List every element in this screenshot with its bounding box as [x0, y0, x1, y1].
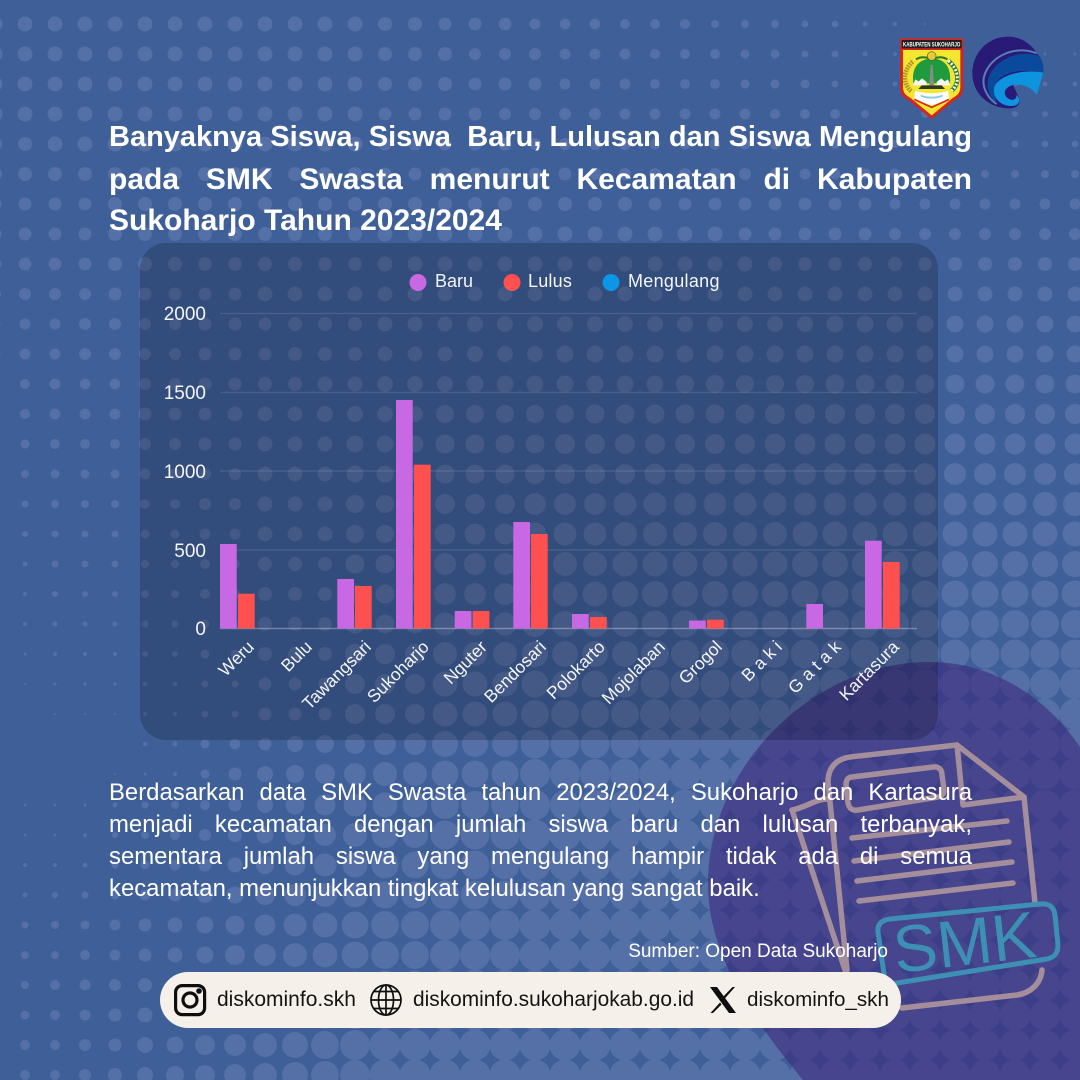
x axis labels: Tawangsari	[298, 637, 375, 713]
bars: Lulus	[238, 465, 900, 628]
x axis labels: Mojolaban	[598, 637, 669, 708]
x axis labels: Bulu	[277, 637, 316, 676]
x axis labels: Nguter	[440, 637, 491, 688]
legend: Mengulang	[628, 271, 720, 291]
y axis labels: 1500	[164, 383, 206, 404]
bars: Baru	[220, 400, 882, 628]
icon: X	[710, 987, 736, 1013]
title	[109, 121, 972, 237]
y axis labels: 2000	[164, 304, 206, 325]
y axis labels: 1000	[164, 462, 206, 483]
x axis labels: Bendosari	[480, 637, 550, 707]
icon: SMK badge: SMK	[889, 897, 1040, 987]
text: website: diskominfo.sukoharjokab.go.id	[413, 988, 694, 1011]
x axis labels: Sukoharjo	[363, 637, 433, 707]
purple circle	[708, 662, 1080, 1080]
icon: instagram	[176, 986, 205, 1015]
x axis labels: Grogol	[675, 637, 726, 688]
legend	[410, 271, 720, 291]
legend: Baru	[435, 271, 473, 291]
y axis labels: 500	[174, 541, 206, 562]
title: pada SMK Swasta menurut Kecamatan di Kabupaten	[109, 162, 972, 196]
legend: Lulus	[528, 271, 572, 291]
x axis labels: G a t a k	[784, 637, 845, 698]
logo: Komdigi globe	[972, 36, 1044, 108]
x axis labels: Polokarto	[542, 637, 609, 703]
title: Sukoharjo Tahun 2023/2024	[109, 204, 502, 237]
text: instagram handle: diskominfo.skh	[217, 988, 356, 1011]
x axis labels: Weru	[214, 637, 258, 680]
description paragraph: Berdasarkan data SMK Swasta tahun 2023/2024, Sukoharjo dan Kartasura	[109, 779, 972, 806]
x axis labels	[214, 637, 903, 713]
logo: Kabupaten Sukoharjo shield: KABUPATEN SUKOHARJO	[903, 42, 961, 48]
description paragraph: menjadi kecamatan dengan jumlah siswa baru dan lulusan terbanyak,	[109, 811, 972, 838]
panel: bar chart	[140, 243, 938, 740]
icon: document	[792, 745, 1042, 1008]
icon: globe	[371, 985, 401, 1015]
y axis labels: 0	[195, 619, 206, 640]
text: X handle: diskominfo_skh	[747, 988, 889, 1011]
footer pill: social contacts	[160, 972, 901, 1028]
title: Banyaknya Siswa, Siswa Baru, Lulusan dan Siswa Mengulang	[109, 121, 972, 153]
x axis labels: B a k i	[737, 637, 786, 685]
source note: Sumber: Open Data Sukoharjo	[628, 940, 888, 962]
x axis labels: Kartasura	[835, 637, 903, 704]
description paragraph: kecamatan, menunjukkan tingkat kelulusan yang sangat baik.	[109, 875, 760, 902]
logo: Kabupaten Sukoharjo shield	[900, 38, 964, 119]
description paragraph: sementara jumlah siswa yang mengulang hampir tidak ada di semua	[109, 843, 972, 870]
description paragraph	[109, 779, 972, 902]
y axis labels	[164, 304, 206, 640]
